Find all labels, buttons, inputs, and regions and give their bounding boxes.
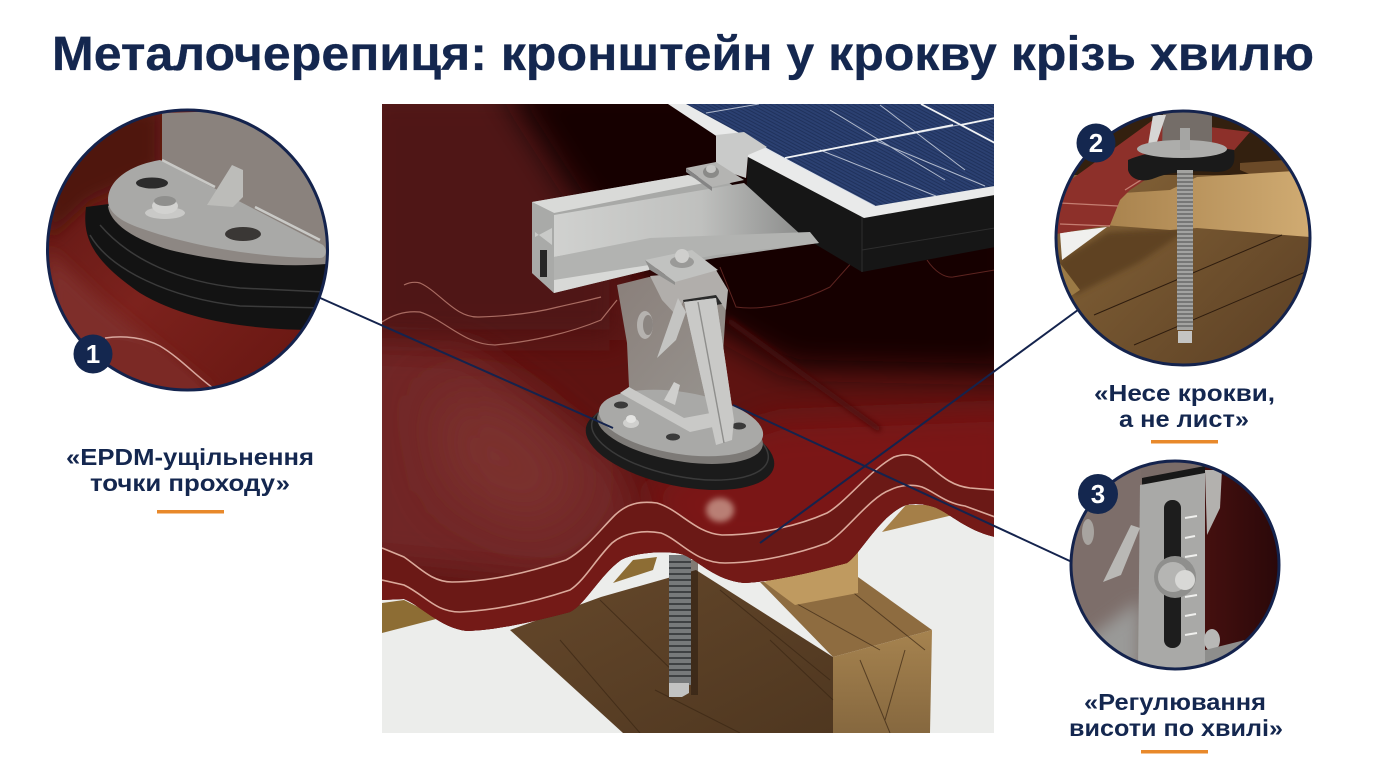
badge 2 [1076, 124, 1116, 162]
badge 1: 1 [86, 339, 100, 369]
central illustration: bracket through roof wave [382, 104, 994, 733]
title: Металочерепиця: кронштейн у крокву крізь хвилю [52, 28, 1314, 81]
aluminium mounting rail [532, 175, 819, 293]
wooden rafter [510, 570, 932, 733]
detail circle 3: height adjustment slot [1071, 461, 1280, 670]
badge 1 [74, 334, 112, 374]
label 1 [66, 444, 314, 514]
solar panel [668, 104, 995, 272]
label 3: висоти по хвилі» [1069, 715, 1283, 741]
threaded stud under the sheet [669, 555, 698, 697]
adjustable galvanised bracket [617, 249, 732, 406]
label 1: точки проходу» [90, 470, 290, 496]
label 3 [1069, 689, 1283, 754]
badge 3: 3 [1091, 479, 1105, 509]
badge 2: 2 [1089, 128, 1103, 158]
wooden battens [382, 505, 953, 633]
panel clamp [686, 132, 767, 191]
red metal roof sheet [382, 104, 994, 631]
label 2: а не лист» [1119, 406, 1249, 432]
label 3: «Регулювання [1084, 689, 1266, 715]
label 2: «Несе крокви, [1094, 380, 1275, 406]
EPDM gasket and base plate [586, 298, 774, 490]
callout line 3 [733, 405, 1072, 562]
label 2 [1094, 380, 1275, 444]
detail circle 1: EPDM seal [47, 110, 330, 395]
badge 3 [1078, 474, 1118, 514]
callout line 1 [318, 297, 613, 428]
detail circle 2: stud through rafter [1050, 110, 1310, 365]
callout line 2 [760, 307, 1082, 543]
label 1: «EPDM-ущільнення [66, 444, 314, 470]
lower folds of the sheet [382, 456, 994, 631]
